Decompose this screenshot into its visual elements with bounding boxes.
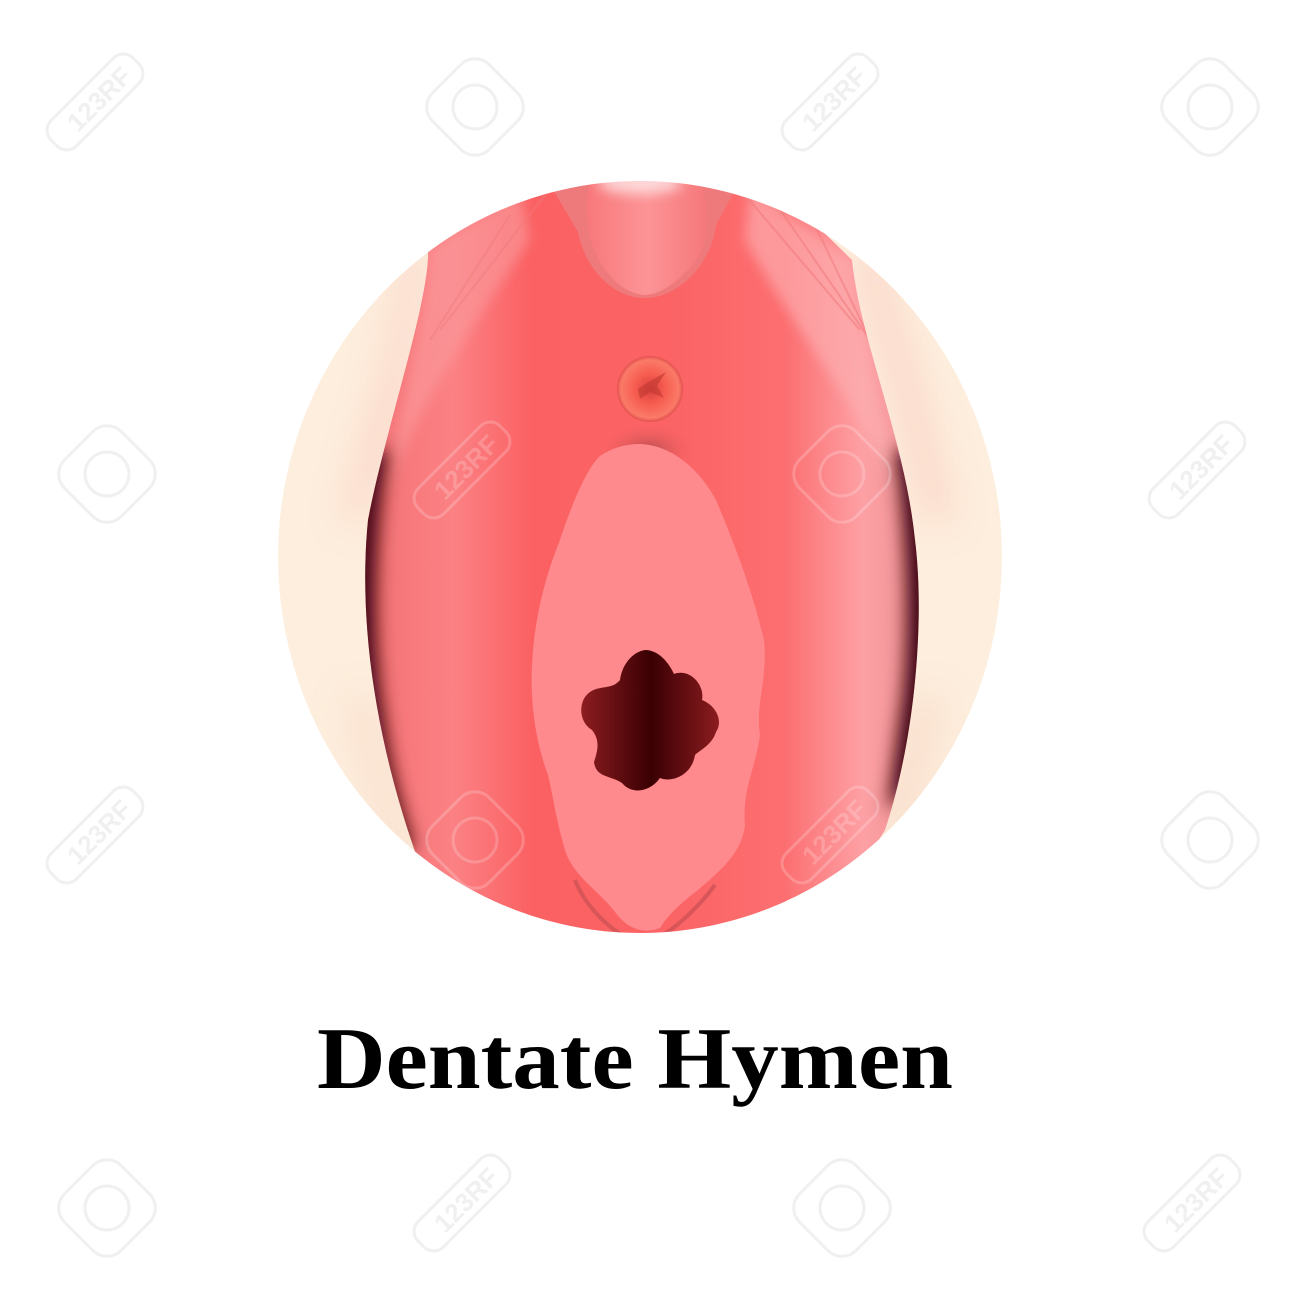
watermarks: 123RF (796, 61, 872, 137)
clitoral hood centre (587, 181, 689, 295)
faint watermarks over disc: 123RF (796, 794, 872, 870)
watermarks: 123RF (61, 61, 137, 137)
watermarks: 123RF (1163, 429, 1239, 505)
watermarks: 123RF (1158, 1162, 1234, 1238)
hymenal opening (581, 650, 719, 790)
right outer highlight (740, 197, 890, 462)
outer tissue (365, 170, 919, 950)
anatomical diagram (278, 170, 1002, 950)
faint watermarks over disc (408, 416, 899, 897)
background disc (278, 181, 1002, 933)
title: Dentate Hymen (317, 1011, 953, 1108)
shadow above hymen (616, 432, 680, 456)
dark left edge (345, 450, 414, 850)
dark right edge (888, 450, 940, 810)
watermarks: 123RF (61, 794, 137, 870)
left outer highlight (392, 200, 532, 466)
tissue shading (345, 185, 940, 850)
upper hood (548, 181, 740, 298)
faint watermarks over disc: 123RF (428, 429, 504, 505)
fold lines right (751, 202, 868, 338)
inner vestibule (532, 444, 765, 931)
lower folds (575, 880, 715, 937)
fold lines left (430, 195, 545, 340)
urethral opening (617, 356, 683, 422)
top highlight (598, 172, 682, 194)
watermarks: 123RF (428, 1162, 504, 1238)
pale shading beside tissue (345, 250, 950, 860)
